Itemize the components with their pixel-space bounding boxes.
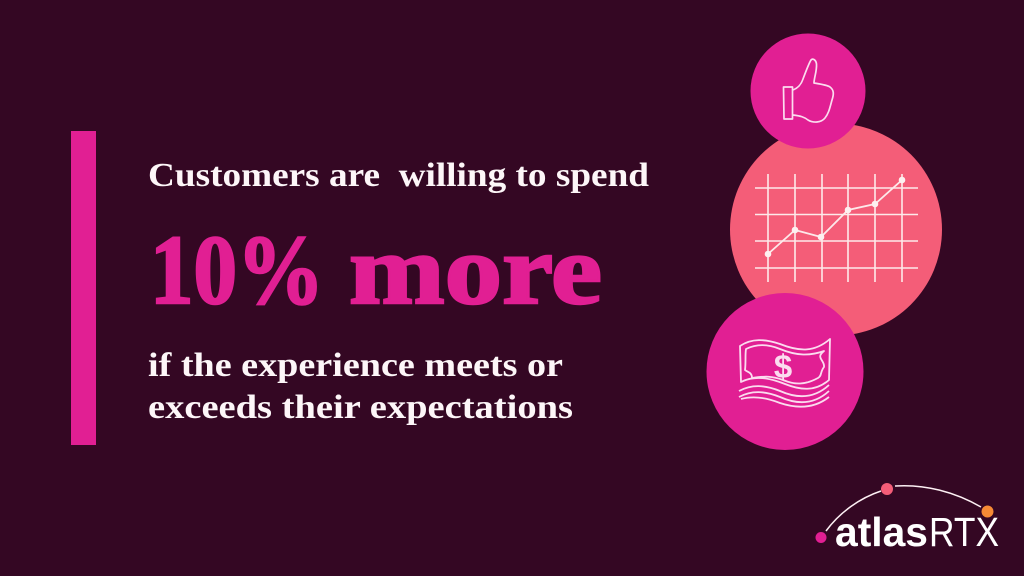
closing text: exceeds their expectations xyxy=(148,389,573,426)
panel: thumbs up circle xyxy=(750,34,866,148)
logo arc xyxy=(826,486,981,531)
icon: dollar sign: $ xyxy=(774,348,792,385)
line chart icon xyxy=(755,174,918,282)
accent bar xyxy=(71,131,96,445)
panel: chart circle xyxy=(730,124,942,336)
logo wordmark: RTX xyxy=(929,509,999,555)
logo: atlasRTX xyxy=(816,483,999,555)
headline: 10% more xyxy=(150,216,602,325)
headline: 10% more: more xyxy=(349,216,602,325)
logo dots xyxy=(816,483,994,543)
logo wordmark: atlas xyxy=(835,509,928,555)
closing text xyxy=(148,347,573,426)
panel: money circle xyxy=(706,293,864,450)
logo wordmark xyxy=(835,509,999,555)
icon: thumbs up xyxy=(784,59,833,122)
intro text: Customers are willing to spend xyxy=(148,157,649,194)
icon: dollar bill xyxy=(739,339,830,407)
closing text: if the experience meets or xyxy=(148,347,563,384)
headline: 10% more: 10% xyxy=(150,216,324,325)
